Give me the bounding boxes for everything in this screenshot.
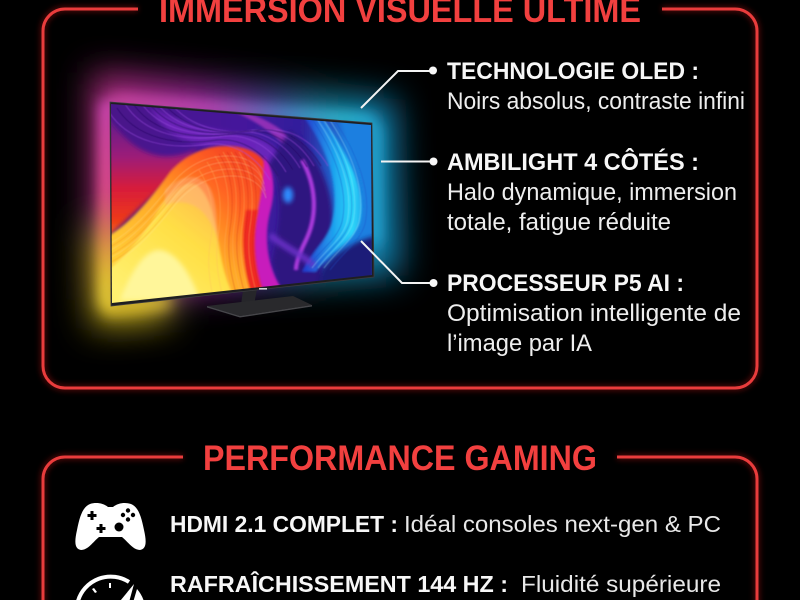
icon: speed gauge: [78, 577, 145, 600]
callout: processeur P5 AI: PROCESSEUR P5 AI :: [447, 270, 684, 297]
text: rafraichissement 144 Hz: Fluidité supérieure: [521, 571, 721, 597]
callout: ambilight 4 cotes: AMBILIGHT 4 CÔTÉS :: [447, 148, 699, 176]
blue spark: [283, 187, 293, 203]
TV bezel: [110, 102, 374, 306]
callout: technologie OLED: Noirs absolus, contraste infini: [447, 88, 745, 115]
panel: performance gaming frame: [43, 457, 757, 600]
left red band: [111, 120, 198, 235]
text: rafraichissement 144 Hz: [170, 570, 721, 597]
callout: technologie OLED: [361, 58, 745, 115]
callout: ambilight 4 cotes: Halo dynamique, immersion: [447, 179, 737, 206]
callout: technologie OLED: TECHNOLOGIE OLED :: [447, 58, 699, 85]
icon: TV stand: [207, 289, 312, 318]
magenta edge: [253, 156, 281, 287]
text: HDMI 2.1: HDMI 2.1 COMPLET :: [170, 511, 398, 537]
orange wave: [112, 144, 266, 290]
text: rafraichissement 144 Hz: RAFRAÎCHISSEMENT 144 HZ :: [170, 570, 508, 597]
callout: processeur P5 AI: [361, 241, 741, 357]
dark blue corner: [318, 236, 375, 284]
yellow inner wave: [112, 182, 232, 303]
text: HDMI 2.1: [170, 511, 721, 537]
TV with Ambilight: [105, 98, 380, 322]
TV screen artwork: [111, 104, 372, 303]
text: HDMI 2.1: Idéal consoles next-gen & PC: [404, 511, 721, 537]
flowing stripes: [105, 156, 266, 266]
callout: ambilight 4 cotes: totale, fatigue réduite: [447, 209, 671, 236]
TV logo: [259, 288, 267, 290]
ambilight halo: [88, 72, 400, 328]
cyan band: [300, 112, 362, 272]
dark purple core: [268, 130, 332, 295]
icon: game controller: [75, 503, 146, 550]
heading: performance gaming: PERFORMANCE GAMING: [203, 439, 597, 478]
callout: ambilight 4 cotes: [381, 148, 737, 236]
callout: processeur P5 AI: Optimisation intelligente de: [447, 300, 741, 327]
callout: processeur P5 AI: l’image par IA: [447, 330, 592, 357]
panel: immersion visuelle frame: [43, 9, 757, 388]
magenta/purple streak: [296, 160, 314, 270]
